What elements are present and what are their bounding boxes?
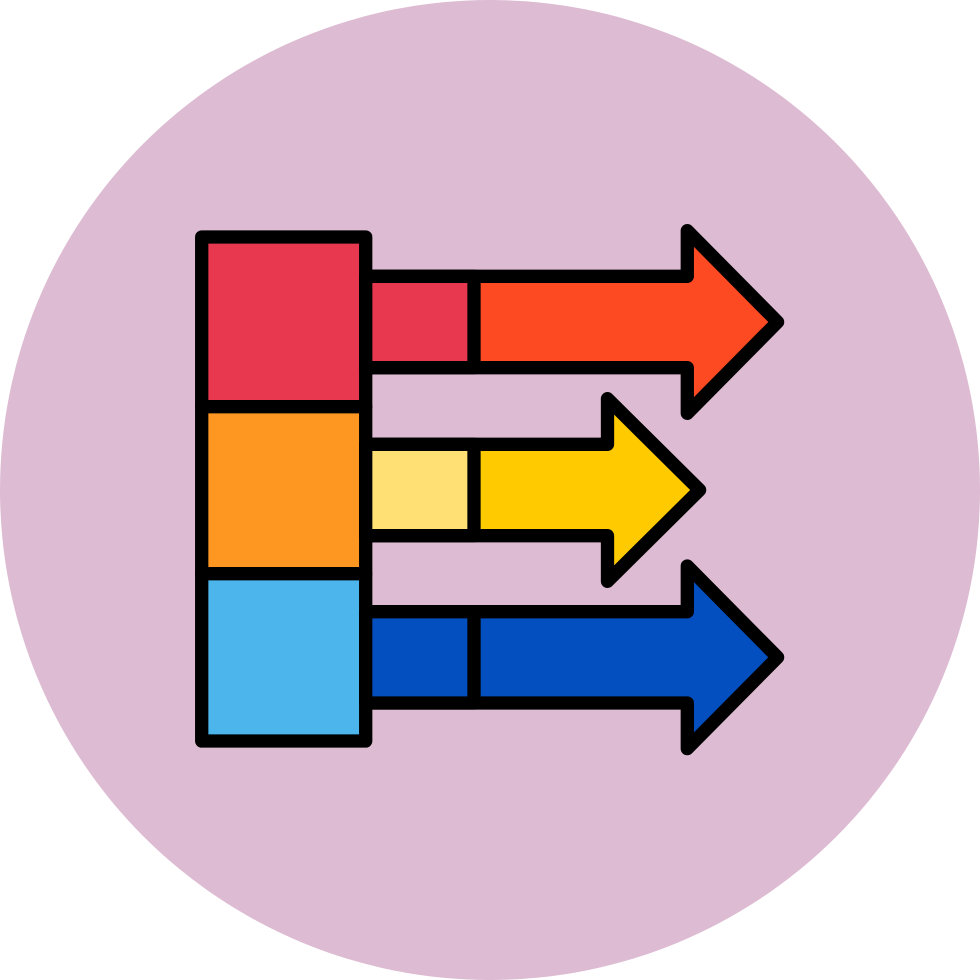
arrow: middle yellow — [366, 399, 700, 581]
arrow: top red-orange — [366, 231, 778, 413]
block: orange — [202, 407, 366, 574]
arrow: bottom blue — [366, 566, 778, 749]
panel: stacked colour blocks — [202, 237, 366, 741]
block: red — [202, 237, 366, 407]
block: light blue — [202, 574, 366, 741]
